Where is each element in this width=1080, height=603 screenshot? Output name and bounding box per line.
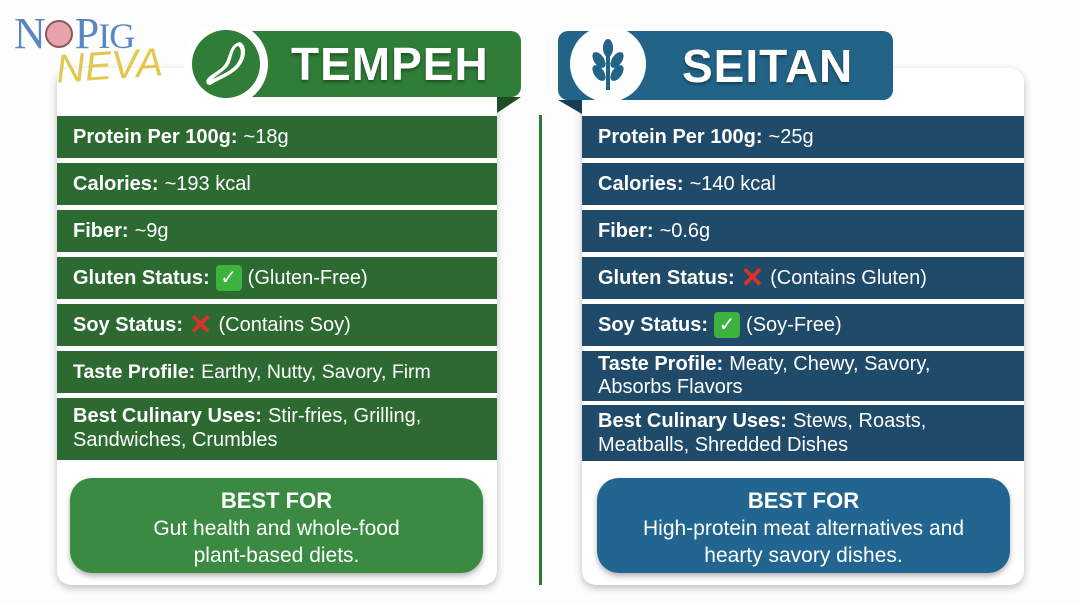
row: gluten: Gluten Status:	[73, 267, 210, 289]
callout: tempeh best for: Gut health and whole-food	[153, 517, 400, 540]
row: gluten: (Gluten-Free)	[248, 267, 368, 289]
row: calories	[57, 163, 497, 205]
row: fiber: ~0.6g	[660, 220, 710, 242]
row: soy	[582, 304, 1024, 346]
callout: tempeh best for: plant-based diets.	[194, 544, 359, 567]
row: calories: Calories:	[598, 173, 684, 195]
row: soy: Soy Status:	[73, 314, 183, 336]
row: protein	[582, 116, 1024, 158]
row: protein: ~18g	[244, 126, 289, 148]
icon: soybean	[184, 22, 268, 106]
row: soy: (Contains Soy)	[218, 314, 351, 336]
callout: tempeh best for	[70, 478, 483, 573]
row: gluten: ✓	[220, 267, 237, 289]
row: uses	[582, 405, 1024, 461]
callout: seitan best for	[597, 478, 1010, 573]
callout: seitan best for: hearty savory dishes.	[704, 544, 903, 567]
row: protein	[57, 116, 497, 158]
row: protein: Protein Per 100g:	[598, 126, 763, 148]
row: taste: Taste Profile:	[73, 361, 195, 383]
callout: seitan best for: High-protein meat alternatives and	[643, 517, 964, 540]
row: soy: (Soy-Free)	[746, 314, 842, 336]
row: fiber: ~9g	[135, 220, 168, 242]
row: soy: ✕	[189, 309, 212, 340]
heading: seitan tab	[558, 31, 893, 100]
icon: wheat	[570, 26, 646, 102]
row: fiber	[57, 210, 497, 252]
logo: N PIG	[14, 9, 134, 58]
row: gluten: (Contains Gluten)	[770, 267, 927, 289]
row: taste: Earthy, Nutty, Savory, Firm	[201, 361, 431, 383]
row: soy: ✓	[719, 314, 735, 336]
row: fiber: Fiber:	[73, 220, 129, 242]
panel: seitan	[582, 68, 1024, 585]
row: gluten	[582, 257, 1024, 299]
logo: NEVA	[55, 40, 164, 92]
callout: tempeh best for: BEST FOR	[221, 488, 332, 513]
heading: seitan tab: SEITAN	[682, 40, 853, 92]
heading: tempeh tab	[195, 31, 521, 97]
row: gluten	[57, 257, 497, 299]
panel: tempeh	[57, 68, 497, 585]
row: uses: Best Culinary Uses: Stir-fries, Grilling, Sandwiches, Crumbles	[73, 405, 421, 451]
fold seitan	[558, 100, 582, 114]
row: taste: Taste Profile: Meaty, Chewy, Savory, Absorbs Flavors	[598, 353, 930, 398]
row: calories: Calories:	[73, 173, 159, 195]
row: fiber	[582, 210, 1024, 252]
tempeh rows	[57, 116, 497, 460]
row: gluten: Gluten Status:	[598, 267, 735, 289]
row: soy	[57, 304, 497, 346]
fold tempeh	[497, 97, 521, 113]
callout: seitan best for: BEST FOR	[748, 488, 859, 513]
row: taste	[57, 351, 497, 393]
row: uses: Best Culinary Uses: Stews, Roasts, Meatballs, Shredded Dishes	[598, 410, 926, 456]
row: taste	[582, 351, 1024, 401]
row: gluten: ✕	[741, 262, 764, 293]
logo	[14, 9, 164, 92]
row: protein: ~25g	[769, 126, 814, 148]
divider	[539, 115, 542, 585]
row: fiber: Fiber:	[598, 220, 654, 242]
heading: tempeh tab: TEMPEH	[291, 38, 489, 90]
row: protein: Protein Per 100g:	[73, 126, 238, 148]
row: calories: ~140 kcal	[690, 173, 776, 195]
row: calories: ~193 kcal	[165, 173, 251, 195]
row: uses	[57, 398, 497, 460]
row: soy: Soy Status:	[598, 314, 708, 336]
seitan rows	[582, 116, 1024, 461]
row: calories	[582, 163, 1024, 205]
